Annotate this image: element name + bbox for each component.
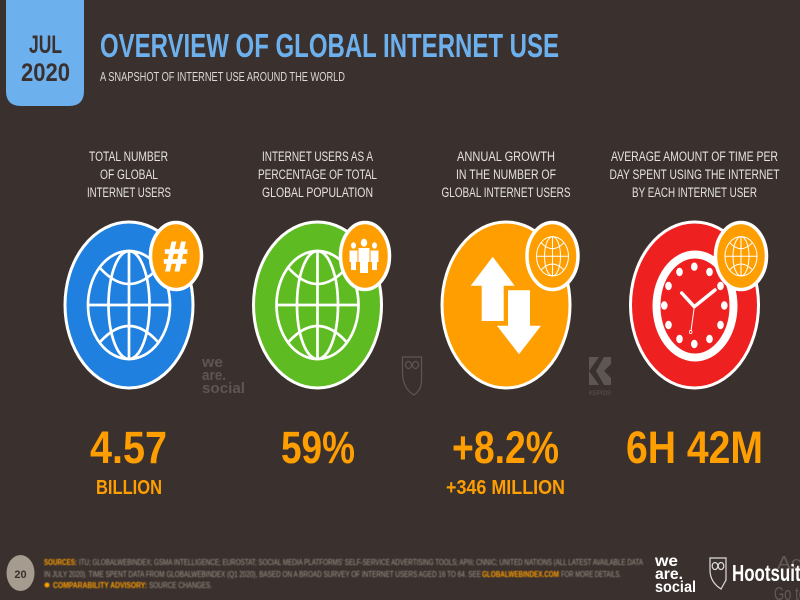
subtitle: A SNAPSHOT OF INTERNET USE AROUND THE WORLD	[100, 70, 345, 84]
date tab: 2020	[21, 59, 70, 87]
icon: blue globe with hash badge: #	[164, 233, 187, 280]
watermark: kepios logo	[589, 357, 611, 397]
sources footnote: FOR MORE DETAILS.	[561, 570, 621, 579]
watermark: we are social: social	[202, 380, 245, 397]
icon: orange up and down arrows with globe badge	[442, 222, 578, 388]
page number: 20	[14, 569, 27, 581]
heading: annual growth: ANNUAL GROWTH	[457, 149, 555, 164]
heading: annual growth: IN THE NUMBER OF	[456, 167, 556, 182]
logo: we are social: social	[655, 579, 696, 596]
heading: percentage	[258, 149, 377, 200]
value: +8.2%: +8.2%	[452, 422, 559, 473]
sources footnote: IN JULY 2020). TIME SPENT DATA FROM GLOBALWEBINDEX (Q1 2020), BASED ON A BROAD SURVEY OF INTERNET USERS AGED 16 TO 64. SEE	[44, 570, 481, 579]
heading: time per day: BY EACH INTERNET USER	[632, 185, 757, 200]
heading: total users: TOTAL NUMBER	[89, 149, 168, 164]
page number	[6, 555, 34, 591]
sources footnote: SOURCE CHANGES.	[149, 581, 212, 590]
logo: we are social	[654, 553, 696, 596]
heading: percentage: INTERNET USERS AS A	[262, 149, 373, 164]
heading: time per day	[610, 149, 780, 200]
heading: total users: OF GLOBAL	[100, 167, 158, 182]
value: 6h 42m: 6H 42M	[626, 422, 763, 473]
value: 4.57 billion	[90, 422, 167, 499]
logo: we are social: are.	[655, 566, 683, 583]
watermark: we are social: are.	[202, 367, 226, 384]
date tab: JUL	[29, 31, 62, 59]
sources footnote: COMPARABILITY ADVISORY:	[53, 581, 147, 590]
value: +8.2%: +346 MILLION	[446, 477, 565, 499]
title: OVERVIEW OF GLOBAL INTERNET USE	[100, 27, 559, 64]
sources footnote: SOURCES:	[44, 558, 77, 567]
watermark: kepios logo: KEPIOS	[589, 391, 611, 397]
value: 4.57 billion: 4.57	[90, 422, 167, 473]
watermark: we are social: we	[201, 354, 223, 371]
value: 4.57 billion: BILLION	[96, 477, 162, 499]
sources footnote: GLOBALWEBINDEX.COM	[482, 570, 559, 579]
icon: blue globe with hash badge	[65, 222, 202, 388]
logo: we are social: we	[654, 553, 678, 570]
date tab	[6, 0, 84, 106]
watermark: we are social	[201, 354, 245, 397]
icon: red clock with globe badge	[630, 222, 766, 388]
icon: green globe with people badge	[254, 222, 390, 388]
overlay text: activate windows	[774, 553, 800, 600]
watermark: owl logo	[402, 357, 422, 395]
heading: total users: INTERNET USERS	[87, 185, 171, 200]
value: 59%: 59%	[281, 422, 355, 473]
sources footnote	[44, 558, 644, 590]
sources footnote: ITU; GLOBALWEBINDEX; GSMA INTELLIGENCE; EUROSTAT; SOCIAL MEDIA PLATFORMS' SELF-SERVICE ADVERTISING TOOLS; APIIi; CNNIC; UNITED NATIONS (ALL LATEST AVAILABLE DATA	[79, 558, 644, 567]
heading: percentage: PERCENTAGE OF TOTAL	[258, 167, 377, 182]
logo: hootsuite owl	[710, 558, 726, 589]
value: +8.2%	[446, 422, 565, 499]
heading: total users	[87, 149, 171, 200]
heading: percentage: GLOBAL POPULATION	[262, 185, 373, 200]
heading: annual growth	[442, 149, 570, 200]
heading: annual growth: GLOBAL INTERNET USERS	[442, 185, 570, 200]
